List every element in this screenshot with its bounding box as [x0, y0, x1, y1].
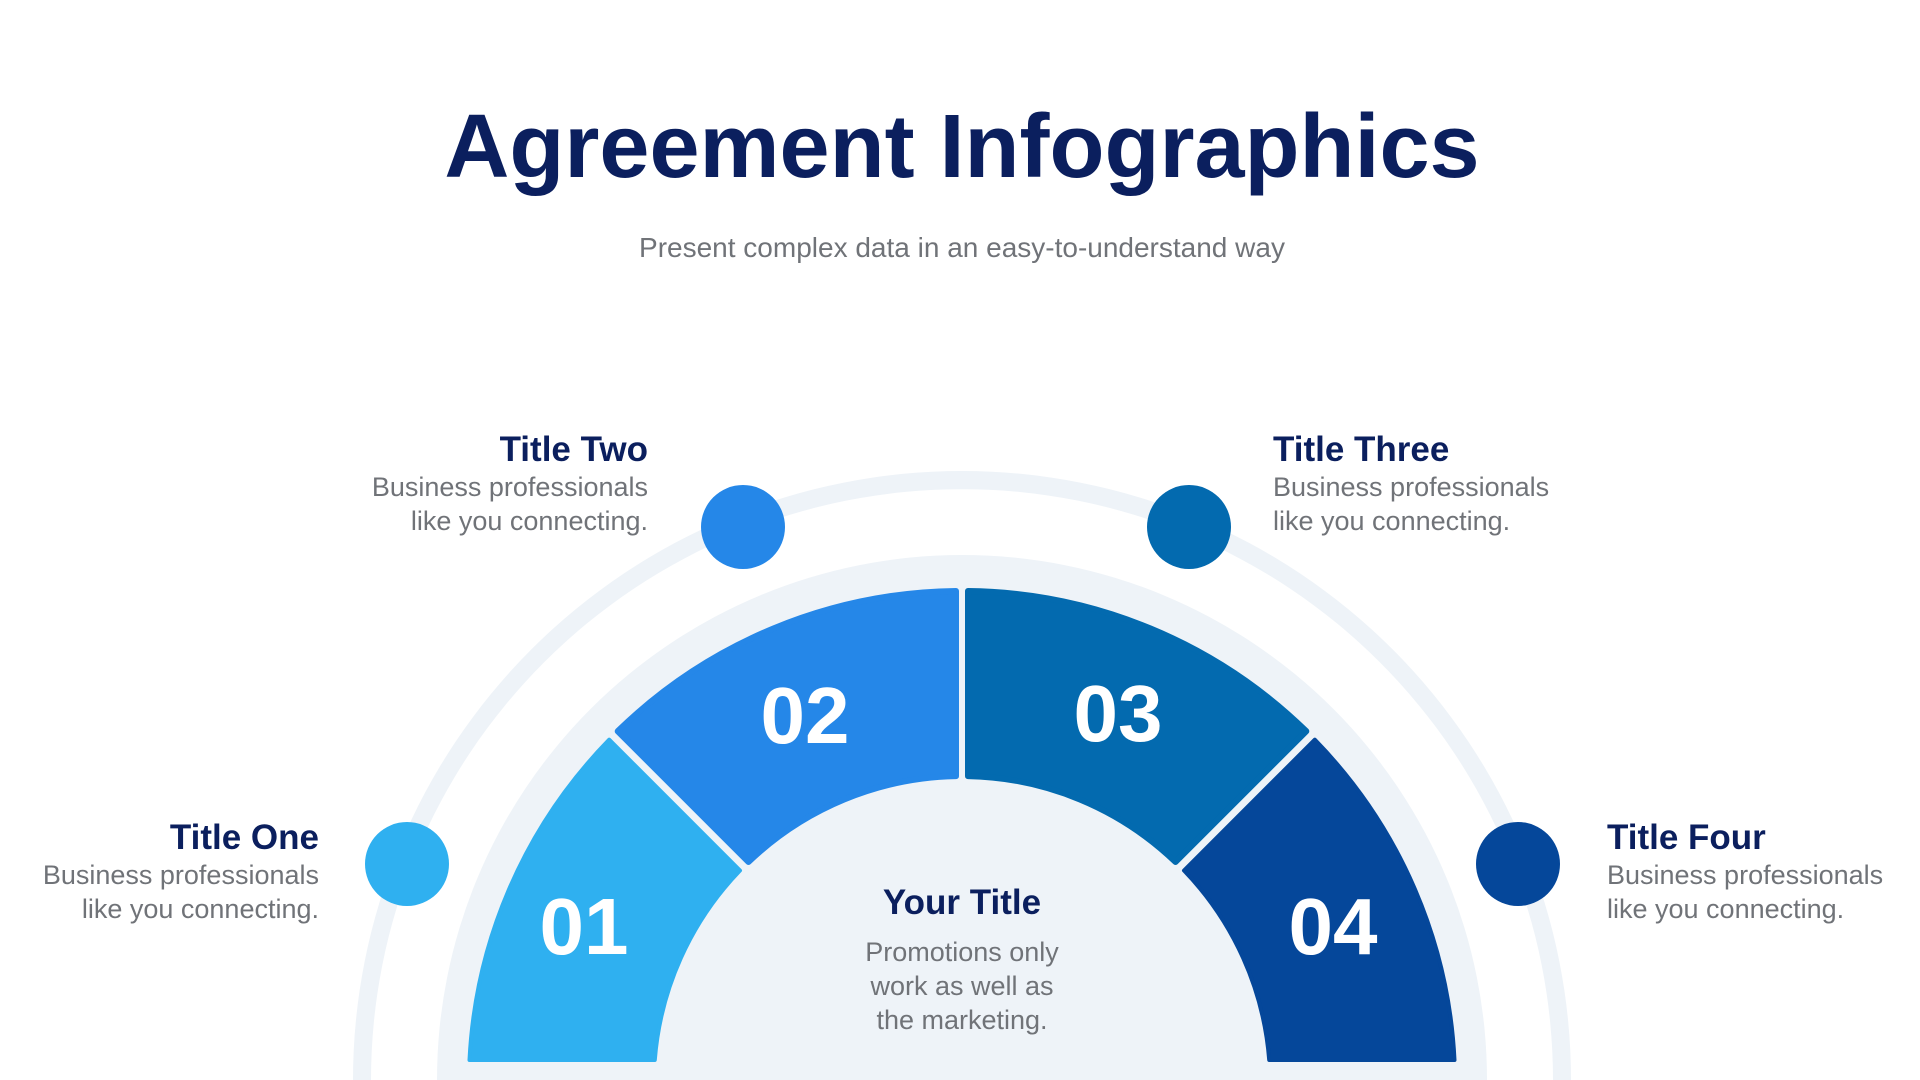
numbers: 04	[1289, 882, 1378, 971]
text: title four: like you connecting.	[1607, 894, 1844, 924]
text: title four: Title Four	[1607, 818, 1766, 857]
text: title one: Business professionals	[43, 860, 319, 890]
title: Agreement Infographics	[444, 97, 1480, 197]
numbers: 01	[540, 882, 628, 971]
center text: work as well as	[870, 971, 1054, 1001]
text: title one	[43, 818, 319, 924]
segment 04	[1184, 740, 1454, 1060]
text: title three	[1273, 430, 1549, 536]
text: title four	[1607, 818, 1883, 924]
subtitle: Present complex data in an easy-to-understand way	[639, 232, 1285, 263]
numbers: 03	[1074, 669, 1162, 758]
text: title three: Title Three	[1273, 430, 1449, 469]
center text: Promotions only	[865, 937, 1059, 967]
text: title three: like you connecting.	[1273, 506, 1510, 536]
markers	[365, 485, 1560, 906]
text: title two	[372, 430, 648, 536]
segment 03	[968, 591, 1306, 862]
center text: the marketing.	[876, 1005, 1048, 1035]
center text	[865, 883, 1059, 1035]
center text: Your Title	[883, 883, 1041, 922]
text: title one: like you connecting.	[82, 894, 319, 924]
text: title two: like you connecting.	[411, 506, 648, 536]
text: title three: Business professionals	[1273, 472, 1549, 502]
numbers	[540, 669, 1378, 971]
text: title one: Title One	[170, 818, 319, 857]
segment 02	[618, 591, 956, 862]
text: title two: Business professionals	[372, 472, 648, 502]
numbers: 02	[761, 671, 849, 760]
text: title two: Title Two	[500, 430, 648, 469]
segment 01	[470, 740, 740, 1060]
text: title four: Business professionals	[1607, 860, 1883, 890]
